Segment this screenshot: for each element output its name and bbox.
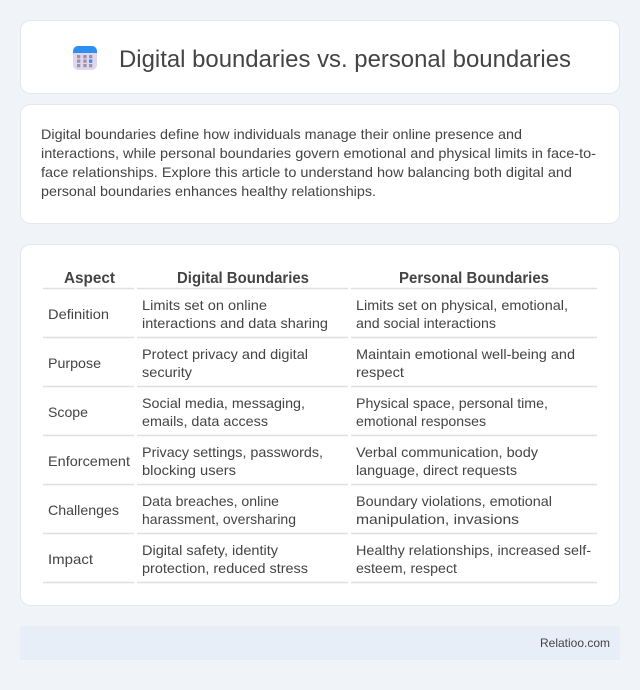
row: definition [48, 297, 568, 331]
row: scope: Social media, messaging, [142, 395, 305, 411]
row: definition: Limits set on online [142, 297, 267, 313]
row: scope: Physical space, personal time, [356, 395, 548, 411]
table header: Aspect [64, 270, 116, 287]
intro text: face relationships. Explore this article to understand how balancing both digital and [41, 164, 572, 180]
row: impact: esteem, respect [356, 560, 457, 576]
row: enforcement: Verbal communication, body [356, 444, 538, 460]
title: Digital boundaries vs. personal boundaries [119, 46, 571, 73]
row: challenges: manipulation, invasions [356, 511, 519, 527]
row: scope [48, 395, 548, 429]
row: definition: Limits set on physical, emotional, [356, 297, 568, 313]
row: challenges: Challenges [48, 502, 119, 518]
row: purpose [48, 346, 575, 380]
row: impact: Digital safety, identity [142, 542, 278, 558]
intro text: Digital boundaries define how individuals manage their online presence and [41, 126, 522, 142]
row: enforcement: Privacy settings, passwords, [142, 444, 323, 460]
row: enforcement [48, 444, 538, 478]
panel: title card [20, 20, 620, 94]
row: impact: protection, reduced stress [142, 560, 308, 576]
table header: Personal Boundaries [399, 270, 549, 287]
intro text: personal boundaries enhances healthy relationships. [41, 183, 376, 199]
intro text [41, 126, 596, 199]
row: purpose: respect [356, 364, 404, 380]
panel: introduction [20, 104, 620, 224]
footer [20, 626, 620, 660]
footer: Relatioo.com [540, 636, 610, 650]
table header [64, 270, 549, 287]
row: purpose: Purpose [48, 355, 101, 371]
row: definition: interactions and data sharing [142, 315, 328, 331]
panel: comparison table [20, 244, 620, 606]
row: scope: emotional responses [356, 413, 486, 429]
row: purpose: Protect privacy and digital [142, 346, 308, 362]
row: impact: Impact [48, 551, 93, 567]
table header: Digital Boundaries [177, 270, 309, 287]
row: definition: Definition [48, 306, 109, 322]
row: enforcement: Enforcement [48, 453, 130, 469]
row: purpose: security [142, 364, 192, 380]
row: challenges: harassment, oversharing [142, 511, 296, 527]
row: enforcement: blocking users [142, 462, 236, 478]
row: definition: and social interactions [356, 315, 496, 331]
row: scope: emails, data access [142, 413, 268, 429]
row: enforcement: language, direct requests [356, 462, 517, 478]
row: challenges: Boundary violations, emotional [356, 493, 552, 509]
row: challenges [48, 493, 552, 527]
row: challenges: Data breaches, online [142, 493, 279, 509]
icon: calendar [73, 46, 97, 70]
row: purpose: Maintain emotional well-being and [356, 346, 575, 362]
row: impact: Healthy relationships, increased self- [356, 542, 591, 558]
row: scope: Scope [48, 404, 88, 420]
row: impact [48, 542, 591, 576]
intro text: interactions, while personal boundaries govern emotional and physical limits in face-to- [41, 145, 596, 161]
